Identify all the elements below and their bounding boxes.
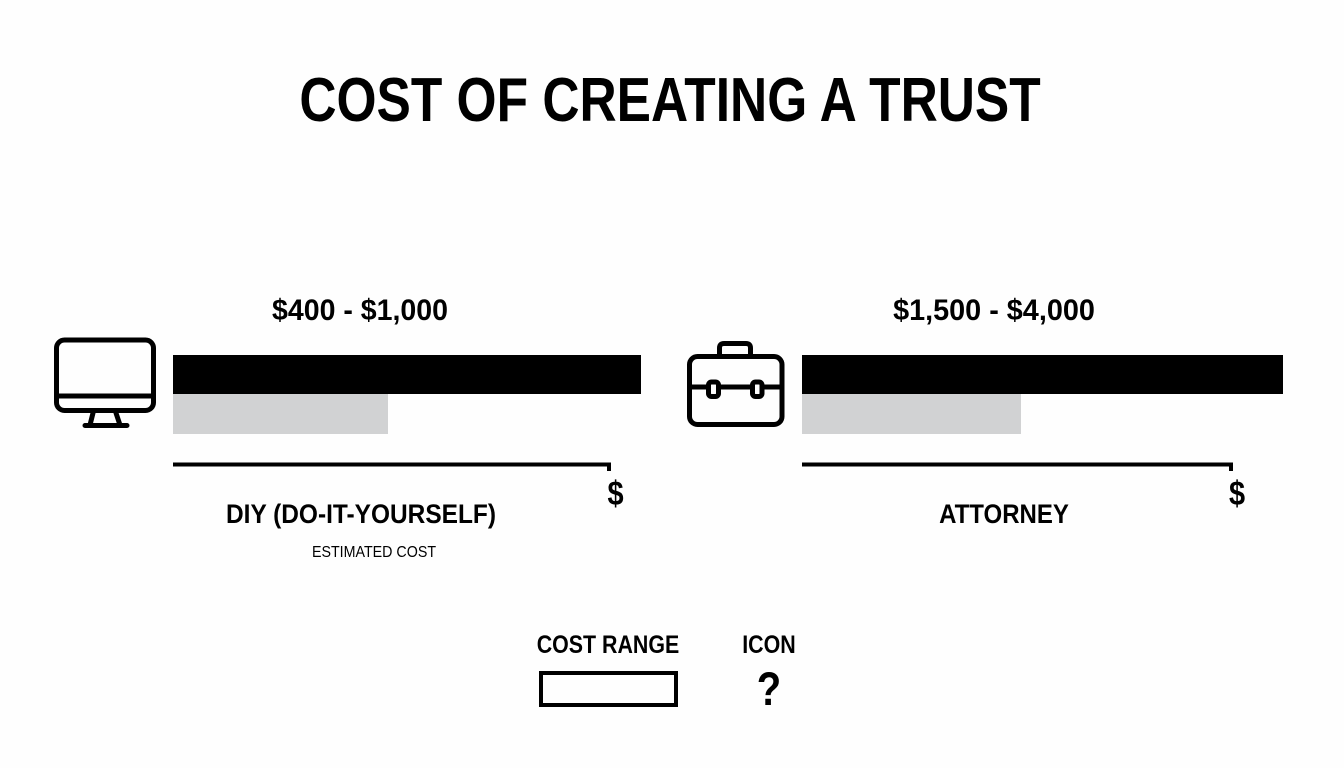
legend icon: question mark: ? [757, 662, 781, 715]
legend [537, 631, 796, 715]
Attorney cost axis [802, 462, 1233, 471]
DIY axis dollar sign: $ [607, 475, 624, 513]
title: COST OF CREATING A TRUST [299, 66, 1041, 135]
DIY cost axis [173, 462, 611, 471]
legend swatch: cost range [539, 671, 678, 707]
estimated cost note: ESTIMATED COST [312, 544, 436, 561]
Attorney black bar [802, 355, 1283, 394]
panel: Attorney [687, 294, 1283, 529]
icon: computer monitor [54, 338, 156, 428]
DIY price range: $400 - $1,000 [272, 294, 448, 327]
Attorney price range: $1,500 - $4,000 [893, 294, 1094, 327]
DIY gray bar [173, 394, 388, 434]
Attorney gray bar [802, 394, 1021, 434]
Attorney axis dollar sign: $ [1229, 475, 1245, 513]
panel: DIY [54, 294, 641, 561]
icon: briefcase [687, 341, 784, 427]
legend label: icon: ICON [742, 631, 796, 659]
legend label: cost range: COST RANGE [537, 631, 679, 659]
Attorney label: ATTORNEY [939, 499, 1069, 529]
DIY black bar [173, 355, 641, 394]
DIY label: DIY (DO-IT-YOURSELF) [226, 499, 496, 529]
